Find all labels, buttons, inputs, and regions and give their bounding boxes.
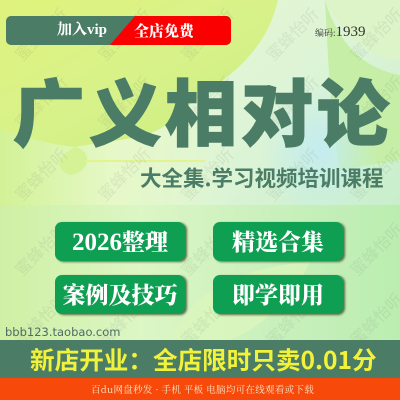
watermarks: 蜜蜂怡听 bbox=[95, 145, 155, 205]
join vip label: 加入vip bbox=[57, 22, 107, 38]
button: selected bbox=[213, 222, 343, 261]
watermarks: 蜜蜂怡听 bbox=[12, 5, 72, 65]
button: 2026 bbox=[55, 222, 185, 261]
watermarks: 蜜蜂怡听 bbox=[12, 73, 72, 133]
free label: 全店免费 bbox=[134, 20, 194, 41]
watermarks: 蜜蜂怡听 bbox=[178, 290, 238, 350]
watermarks: 蜜蜂怡听 bbox=[263, 290, 323, 350]
promo text: 新店开业：全店限时只卖0.01分 bbox=[30, 341, 377, 377]
watermarks: 蜜蜂怡听 bbox=[12, 220, 72, 280]
button: learn: 即学即用 bbox=[232, 277, 324, 310]
watermarks: 蜜蜂怡听 bbox=[95, 290, 155, 350]
watermarks: 蜜蜂怡听 bbox=[178, 73, 238, 133]
promo banner bbox=[0, 340, 400, 378]
button: selected: 精选合集 bbox=[232, 224, 324, 257]
footer text: 百du网盘秒发 · 手机 平板 电脑均可在线观看或下载 bbox=[91, 382, 314, 396]
button: learn bbox=[213, 275, 343, 314]
watermarks: 蜜蜂怡听 bbox=[12, 290, 72, 350]
title: 广义相对论 bbox=[13, 56, 393, 161]
product code: 编码:1939 bbox=[315, 24, 366, 40]
watermarks: 蜜蜂怡听 bbox=[178, 5, 238, 65]
watermarks: 蜜蜂怡听 bbox=[263, 145, 323, 205]
red diagonal segment bbox=[110, 16, 231, 45]
subtitle: 大全集.学习视频培训课程 bbox=[140, 162, 384, 193]
watermarks: 蜜蜂怡听 bbox=[178, 220, 238, 280]
watermarks: 蜜蜂怡听 bbox=[12, 145, 72, 205]
watermarks: 蜜蜂怡听 bbox=[178, 145, 238, 205]
watermarks: 蜜蜂怡听 bbox=[95, 5, 155, 65]
watermarks: 蜜蜂怡听 bbox=[263, 73, 323, 133]
watermarks: 蜜蜂怡听 bbox=[95, 73, 155, 133]
button: 2026: 2026整理 bbox=[72, 224, 168, 257]
footer bar bbox=[0, 378, 400, 400]
watermarks: 蜜蜂怡听 bbox=[263, 5, 323, 65]
top badge: VIP and free bbox=[6, 16, 231, 45]
shop url: bbb123.taobao.com bbox=[5, 325, 120, 339]
button: cases: 案例及技巧 bbox=[62, 277, 178, 310]
